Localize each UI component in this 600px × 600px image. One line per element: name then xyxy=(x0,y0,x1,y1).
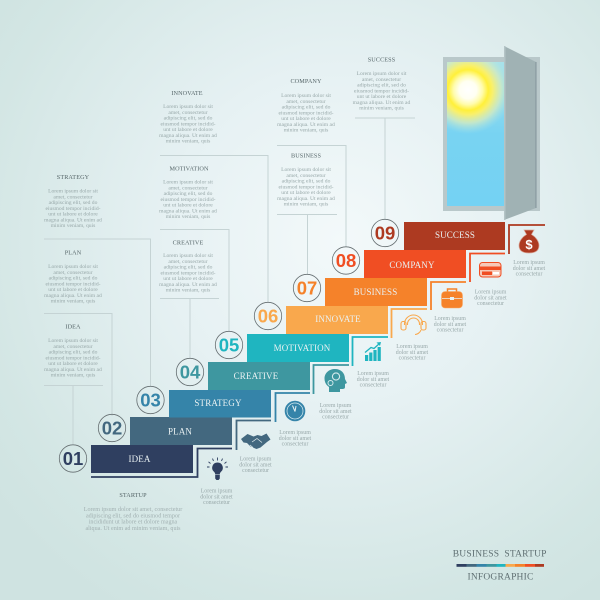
text block: motivation: minim veniam, quis xyxy=(166,214,210,220)
text block: strategy: magna aliqua. Ut enim ad xyxy=(44,217,102,223)
icon captions: Lorem ipsum xyxy=(240,456,271,462)
text block: success: Lorem ipsum dolor sit xyxy=(357,71,406,77)
text block: strategy xyxy=(44,174,102,229)
text block: company: amet, consectetur xyxy=(286,99,326,105)
number 08: 08 xyxy=(336,250,356,271)
icon captions: consectetur xyxy=(360,383,386,389)
footer title: BUSINESS xyxy=(453,550,499,560)
number 01 xyxy=(59,445,87,472)
text block: motivation: adipiscing elit, sed do xyxy=(164,191,213,197)
text block: motivation: unt ut labore et dolore xyxy=(163,202,213,208)
text block: success: eiusmod tempor incidid- xyxy=(354,88,409,94)
icon captions: consectetur xyxy=(322,415,349,421)
text block: business: amet, consectetur xyxy=(286,173,326,179)
stair step 01: idea: IDEA xyxy=(128,454,151,464)
stair step 08: company: COMPANY xyxy=(389,260,435,270)
number 01: 01 xyxy=(63,448,83,469)
icon: handshake xyxy=(241,434,270,449)
icon captions: Lorem ipsum xyxy=(396,344,428,350)
text block: creative xyxy=(159,240,217,294)
text block: plan: unt ut labore et dolore xyxy=(48,287,98,293)
icon captions: Lorem ipsum xyxy=(279,430,311,436)
text block: plan xyxy=(44,250,102,304)
stair step 05: motivation xyxy=(247,334,349,362)
text block: success: adipiscing elit, sed do xyxy=(357,82,406,88)
text block: innovate: minim veniam, quis xyxy=(166,138,210,144)
text block: startup: incididunt ut labore et dolore magna xyxy=(89,520,178,526)
text block: company xyxy=(277,78,335,134)
text block: success: minim veniam, quis xyxy=(359,106,404,112)
text block: company: COMPANY xyxy=(290,78,322,85)
text block: business: adipiscing elit, sed do xyxy=(282,178,331,184)
text block: strategy: Lorem ipsum dolor sit xyxy=(48,188,98,194)
number 02 xyxy=(98,414,126,442)
text block: startup: STARTUP xyxy=(119,492,147,499)
number 07 xyxy=(293,274,321,302)
text block: idea xyxy=(44,324,102,378)
connector lines: step callouts xyxy=(44,118,415,444)
icon: money bag xyxy=(519,230,539,253)
icon captions: dolor sit amet xyxy=(357,377,390,383)
icon captions: Lorem ipsum xyxy=(357,371,389,377)
text block: startup xyxy=(84,492,182,532)
icon captions: consectetur xyxy=(242,468,269,474)
stair step 03: strategy: STRATEGY xyxy=(194,398,242,408)
icon captions: consectetur xyxy=(437,328,463,334)
icon captions: dolor sit amet xyxy=(319,409,352,415)
icon: clock xyxy=(285,401,305,421)
text block: motivation: eiusmod tempor incidid- xyxy=(160,197,216,203)
text block: motivation xyxy=(159,166,217,220)
text block: plan: PLAN xyxy=(65,250,82,256)
icon captions: consectetur xyxy=(477,301,504,307)
icon captions: Lorem ipsum xyxy=(320,403,351,409)
stair step 03: strategy xyxy=(169,390,271,418)
number 09: 09 xyxy=(375,222,395,244)
number 04: 04 xyxy=(180,362,201,382)
icon captions: dolor sit amet xyxy=(474,295,507,301)
text block: success: SUCCESS xyxy=(368,56,396,64)
footer title xyxy=(453,550,547,582)
icon: light bulb xyxy=(207,458,228,480)
icon captions: Lorem ipsum xyxy=(475,290,506,296)
text block: business: unt ut labore et dolore xyxy=(281,190,331,196)
text block: business xyxy=(277,152,335,208)
text block: creative: eiusmod tempor incidid- xyxy=(160,270,216,276)
text block: plan: minim veniam, quis xyxy=(51,298,95,304)
icon captions: consectetur xyxy=(399,356,425,362)
text block: company: adipiscing elit, sed do xyxy=(282,104,331,110)
text block: business: BUSINESS xyxy=(291,152,321,160)
number 05 xyxy=(215,331,243,359)
icon: money bag: $ xyxy=(525,237,533,252)
stair step 08: company xyxy=(364,250,466,278)
stair step 06: innovate xyxy=(286,306,388,334)
text block: motivation: magna aliqua. Ut enim ad xyxy=(159,208,217,214)
number 08 xyxy=(332,247,360,274)
stair step 04: creative xyxy=(208,362,310,390)
stair step 07: business: BUSINESS xyxy=(354,287,397,297)
stair step 02: plan: PLAN xyxy=(168,426,192,436)
text block: strategy: adipiscing elit, sed do xyxy=(49,200,98,206)
icon captions: dolor sit amet xyxy=(200,494,233,500)
stair step 06: innovate: INNOVATE xyxy=(315,314,361,324)
text block: idea: Lorem ipsum dolor sit xyxy=(48,338,98,344)
door xyxy=(443,46,540,220)
text block: creative: unt ut labore et dolore xyxy=(163,276,213,282)
text block: innovate: Lorem ipsum dolor sit xyxy=(163,104,213,110)
icon captions: Lorem ipsum xyxy=(201,488,232,494)
text block: business: Lorem ipsum dolor sit xyxy=(281,167,331,173)
text block: motivation: Lorem ipsum dolor sit xyxy=(163,180,213,186)
number 03 xyxy=(137,386,164,414)
text block: motivation: amet, consectetur xyxy=(168,185,208,191)
footer title: STARTUP xyxy=(504,550,547,560)
text block: startup: adipiscing elit, sed do eiusmod tempor xyxy=(86,513,180,519)
text block: strategy: unt ut labore et dolore xyxy=(48,212,98,218)
icon: credit card xyxy=(480,262,501,277)
icon captions: consectetur xyxy=(516,272,542,278)
icon: briefcase xyxy=(442,289,462,308)
number 09 xyxy=(371,219,399,247)
text block: business: eiusmod tempor incidid- xyxy=(278,184,334,190)
text block: startup: Lorem ipsum dolor sit amet, consectetur xyxy=(84,507,182,513)
text block: idea: adipiscing elit, sed do xyxy=(49,350,98,356)
text block: strategy: amet, consectetur xyxy=(53,194,93,200)
icon captions: Lorem ipsum xyxy=(434,316,466,322)
text block: plan: amet, consectetur xyxy=(53,270,93,276)
number 06 xyxy=(254,302,282,330)
text block: innovate: unt ut labore et dolore xyxy=(163,127,213,133)
icon captions: dolor sit amet xyxy=(513,266,546,272)
bracket lines under steps xyxy=(91,225,545,477)
stair step 02: plan xyxy=(130,417,232,445)
stair step 07: business xyxy=(325,278,427,306)
text block: innovate xyxy=(159,90,217,144)
text block: company: eiusmod tempor incidid- xyxy=(278,110,334,116)
text block: motivation: MOTIVATION xyxy=(169,166,209,172)
stair step 09: success xyxy=(404,222,505,250)
text block: plan: magna aliqua. Ut enim ad xyxy=(44,293,102,299)
text block: success: unt ut labore et dolore xyxy=(357,94,407,100)
text block: company: unt ut labore et dolore xyxy=(281,116,331,122)
icon: head with gears xyxy=(324,369,347,392)
number 03: 03 xyxy=(140,390,161,410)
stair step 01: idea xyxy=(91,445,193,473)
text block: success xyxy=(353,56,411,112)
icon captions: dolor sit amet xyxy=(434,322,467,328)
text block: idea: unt ut labore et dolore xyxy=(48,361,98,367)
text block: innovate: magna aliqua. Ut enim ad xyxy=(159,133,217,139)
text block: company: Lorem ipsum dolor sit xyxy=(281,93,331,99)
text block: innovate: adipiscing elit, sed do xyxy=(164,116,213,122)
icon captions xyxy=(200,260,546,506)
text block: plan: adipiscing elit, sed do xyxy=(49,276,98,282)
icon captions: dolor sit amet xyxy=(239,462,272,468)
text block: creative: amet, consectetur xyxy=(168,259,208,265)
icon: headset xyxy=(401,315,426,334)
text block: strategy: minim veniam, quis xyxy=(51,223,95,229)
text block: idea: magna aliqua. Ut enim ad xyxy=(44,367,102,373)
icon captions: Lorem ipsum xyxy=(513,260,545,266)
text block: plan: eiusmod tempor incidid- xyxy=(46,281,101,287)
icon: growth chart xyxy=(365,342,381,361)
number 06: 06 xyxy=(258,306,278,326)
icon captions: dolor sit amet xyxy=(396,350,429,356)
stair step 09: success: SUCCESS xyxy=(435,230,475,240)
text block: strategy: eiusmod tempor incidid- xyxy=(46,206,101,212)
text block: creative: CREATIVE xyxy=(173,240,203,246)
footer title: INFOGRAPHIC xyxy=(467,572,534,582)
number 04 xyxy=(176,358,204,386)
text block: success: amet, consectetur xyxy=(362,77,401,83)
text block: success: magna aliqua. Ut enim ad xyxy=(353,100,411,106)
stair step 04: creative: CREATIVE xyxy=(234,371,279,381)
text block: innovate: INNOVATE xyxy=(171,90,203,97)
text block: creative: adipiscing elit, sed do xyxy=(164,264,213,270)
stair step 05: motivation: MOTIVATION xyxy=(274,343,331,353)
text block: creative: minim veniam, quis xyxy=(166,288,210,294)
icon captions: consectetur xyxy=(282,442,308,448)
text block: startup: aliqua. Ut enim ad minim veniam, quis xyxy=(85,526,181,532)
text block: idea: IDEA xyxy=(65,324,81,330)
text block: business: minim veniam, quis xyxy=(284,202,328,208)
icon captions: dolor sit amet xyxy=(279,436,312,442)
text block: innovate: eiusmod tempor incidid- xyxy=(160,121,216,127)
text block: strategy: STRATEGY xyxy=(57,174,90,181)
text block: innovate: amet, consectetur xyxy=(168,110,208,116)
number 02: 02 xyxy=(102,418,122,438)
text block: creative: Lorem ipsum dolor sit xyxy=(163,253,213,259)
icon captions: consectetur xyxy=(203,500,230,506)
text block: company: magna aliqua. Ut enim ad xyxy=(277,122,335,128)
number 05: 05 xyxy=(219,334,239,356)
text block: business: magna aliqua. Ut enim ad xyxy=(277,196,335,202)
number 07: 07 xyxy=(297,278,317,298)
text block: plan: Lorem ipsum dolor sit xyxy=(48,264,98,270)
text block: idea: eiusmod tempor incidid- xyxy=(46,355,101,361)
text block: creative: magna aliqua. Ut enim ad xyxy=(159,282,217,288)
text block: idea: minim veniam, quis xyxy=(51,372,95,378)
text block: idea: amet, consectetur xyxy=(53,344,93,350)
text block: company: minim veniam, quis xyxy=(284,128,328,134)
